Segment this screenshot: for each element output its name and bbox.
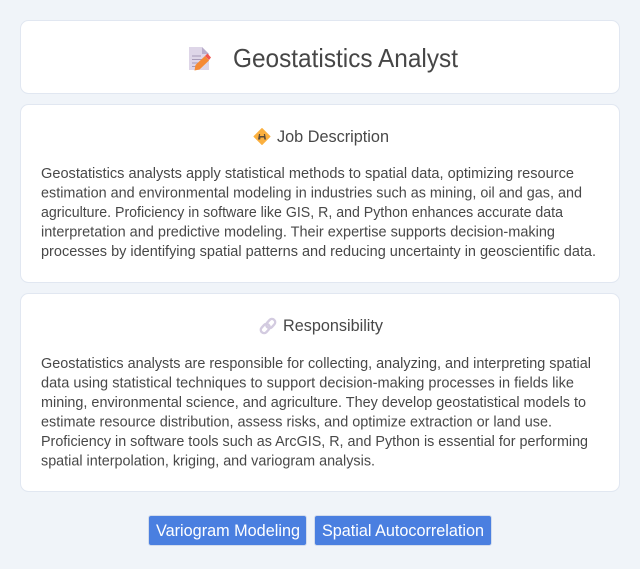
text block: job description: interpretation and predictive modeling. Their expertise supports decision-making [41,224,555,240]
tag: spatial autocorrelation [314,516,492,546]
text block: job description: Geostatistics analysts apply statistical methods to spatial data, optimizing resource [41,166,574,182]
text block: responsibility: estimate resource distribution, assess risks, and optimize extraction or land use. [41,414,552,430]
icon: chain link [259,318,276,334]
text block: responsibility [41,356,591,470]
text block: responsibility: Proficiency in software tools such as ArcGIS, R, and Python is essential for performing [41,434,588,450]
text block: responsibility: mining, environmental science, and agriculture. They develop geostatistical models to [41,395,586,411]
tag: variogram modeling [148,516,306,546]
text block: responsibility: Geostatistics analysts are responsible for collecting, analyzing, and interpreting spatial [41,356,591,372]
text block: job description: estimation and environmental modeling in industries such as mining, oil and gas, and [41,186,582,202]
text block: job description [41,166,596,260]
heading: job description: Job Description [277,127,389,146]
title: Geostatistics Analyst [233,43,459,73]
text block: job description: agriculture. Proficiency in software like GIS, R, and Python enhances accurate data [41,205,564,221]
tag: spatial autocorrelation: Spatial Autocorrelation [322,521,484,540]
icon: document with pencil [189,47,211,70]
tag: variogram modeling: Variogram Modeling [156,521,300,540]
text block: responsibility: data using statistical techniques to support decision-making processes in fields like [41,376,574,392]
panel: job description [20,104,620,282]
panel: title header [20,20,620,94]
panel: responsibility [20,294,620,492]
icon: orange diamond sign [254,128,270,144]
text block: job description: processes by identifying spatial patterns and reducing uncertainty in geoscientific data. [41,244,596,260]
heading: responsibility: Responsibility [283,316,384,335]
text block: responsibility: spatial interpolation, kriging, and variogram analysis. [41,454,375,470]
